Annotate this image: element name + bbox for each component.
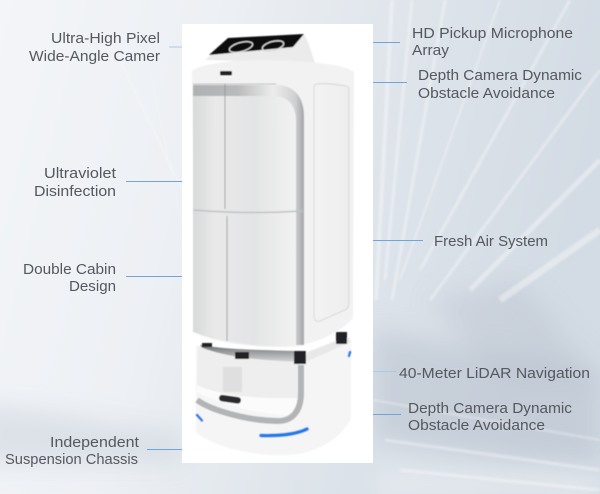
robot base bbox=[196, 332, 351, 455]
chassis gap shadow bbox=[200, 345, 296, 362]
label: double cabin: Design bbox=[69, 279, 116, 295]
label: lidar: 40-Meter LiDAR Navigation bbox=[399, 366, 590, 382]
label: microphone: HD Pickup Microphone bbox=[412, 26, 573, 42]
label: depth camera bottom: Obstacle Avoidance bbox=[408, 418, 545, 434]
white photo panel bbox=[182, 24, 373, 463]
robot top door chrome trim bbox=[193, 85, 304, 345]
camera bbox=[219, 72, 232, 78]
label: suspension: Independent bbox=[50, 435, 139, 451]
label: depth camera bottom: Depth Camera Dynamic bbox=[408, 401, 572, 417]
robot illustration bbox=[192, 34, 354, 455]
label: camera: Wide-Angle Camer bbox=[29, 49, 160, 65]
label: double cabin: Double Cabin bbox=[23, 262, 116, 278]
base front glass bbox=[197, 346, 300, 415]
base chrome trim bbox=[197, 365, 301, 421]
robot upper body bbox=[192, 60, 354, 347]
side panel bbox=[314, 84, 349, 321]
door seams bbox=[193, 84, 276, 341]
base handle bbox=[219, 394, 241, 404]
label: depth camera top: Obstacle Avoidance bbox=[418, 86, 555, 102]
label: camera: Ultra-High Pixel bbox=[51, 31, 160, 47]
cabin divider bbox=[193, 210, 303, 212]
label: ultraviolet: Disinfection bbox=[34, 184, 116, 200]
blue light strips bbox=[197, 352, 350, 436]
leader lines bbox=[126, 42, 423, 450]
chassis joints bbox=[202, 332, 347, 364]
label: suspension: Suspension Chassis bbox=[5, 452, 138, 468]
label: fresh air: Fresh Air System bbox=[434, 234, 548, 250]
label: microphone: Array bbox=[412, 43, 450, 59]
robot neck and screen bbox=[205, 34, 315, 63]
label: depth camera top: Depth Camera Dynamic bbox=[418, 68, 582, 84]
label: ultraviolet: Ultraviolet bbox=[44, 166, 116, 182]
